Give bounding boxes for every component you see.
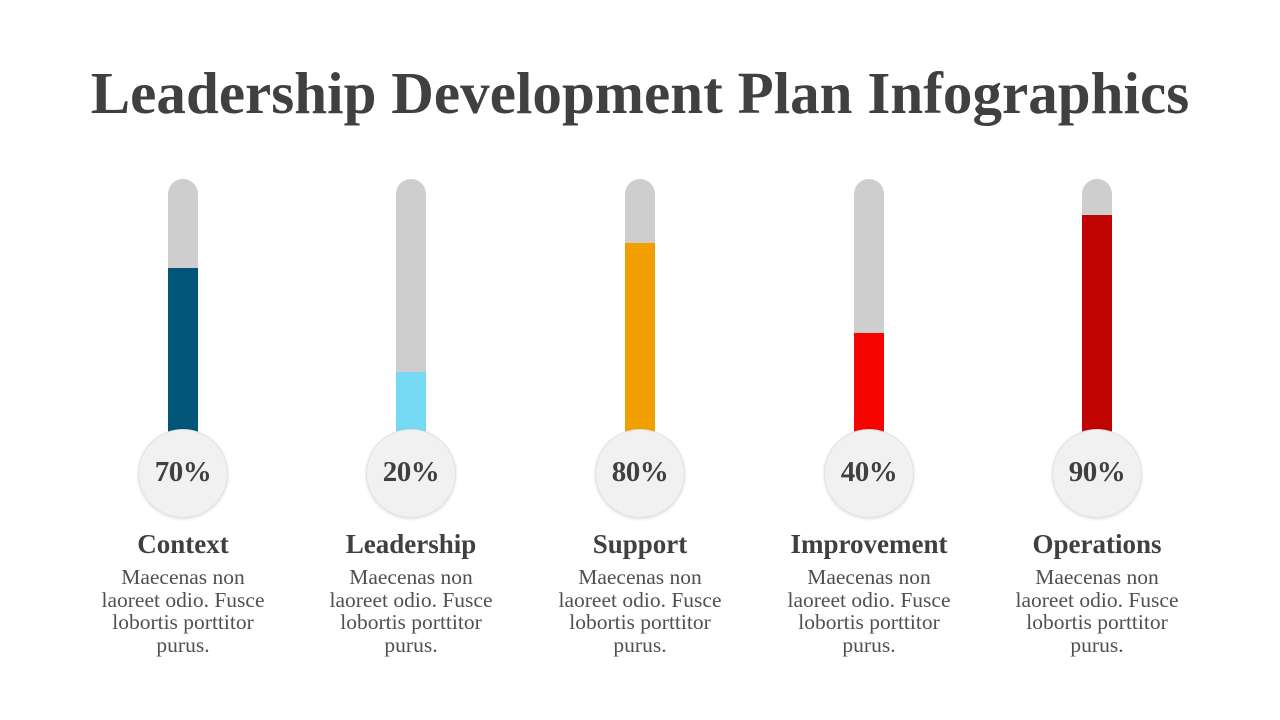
text block: Support: purus. [613,633,667,657]
panel: Improvement [788,179,950,657]
text block: Improvement [788,565,950,657]
text block: Operations: purus. [1070,633,1124,657]
text block: Support [558,565,722,657]
text block: Improvement: Maecenas non [807,565,931,589]
heading: Operations: Operations [1032,529,1162,559]
thermometer bar: Support 80% [625,179,655,449]
percentage circle: 20% [366,429,456,518]
percentage circle: 90%: 90% [1069,456,1125,488]
text block: Leadership: laoreet odio. Fusce [330,588,492,612]
percentage circle: 70%: 70% [155,456,211,488]
panel: Context [102,179,264,657]
text block: Improvement: purus. [842,633,896,657]
thermometer bar: Leadership 20% [396,179,426,449]
text block: Improvement: lobortis porttitor [798,610,940,634]
percentage circle: 90% [1052,429,1142,518]
title: Leadership Development Plan Infographics [91,60,1189,126]
percentage circle: 20%: 20% [383,456,439,488]
text block: Context [102,565,264,657]
panel: Support [558,179,722,657]
text block: Support: lobortis porttitor [569,610,711,634]
text block: Leadership: purus. [384,633,438,657]
panel: Leadership [330,179,492,657]
text block: Context: lobortis porttitor [112,610,254,634]
text block: Context: purus. [156,633,210,657]
percentage circle: 80% [595,429,685,518]
heading: Improvement: Improvement [790,529,947,559]
percentage circle: 40%: 40% [841,456,897,488]
text block: Leadership: Maecenas non [349,565,473,589]
percentage circle: 40% [824,429,914,518]
text block: Leadership [330,565,492,657]
text block: Operations: lobortis porttitor [1026,610,1168,634]
text block: Support: Maecenas non [578,565,702,589]
text block: Leadership: lobortis porttitor [340,610,482,634]
percentage circle: 80%: 80% [612,456,668,488]
panel: Operations [1016,179,1178,657]
thermometer bar: Improvement 40% [854,179,884,449]
text block: Context: Maecenas non [121,565,245,589]
text block: Improvement: laoreet odio. Fusce [788,588,950,612]
heading: Context: Context [137,529,229,559]
thermometer bar: Operations 90% [1082,179,1112,449]
text block: Operations: Maecenas non [1035,565,1159,589]
text block: Operations: laoreet odio. Fusce [1016,588,1178,612]
text block: Operations [1016,565,1178,657]
thermometer bar: Context 70% [168,179,198,449]
percentage circle: 70% [138,429,228,518]
text block: Support: laoreet odio. Fusce [558,588,722,612]
heading: Support: Support [593,529,687,559]
heading: Leadership: Leadership [346,529,476,559]
text block: Context: laoreet odio. Fusce [102,588,264,612]
